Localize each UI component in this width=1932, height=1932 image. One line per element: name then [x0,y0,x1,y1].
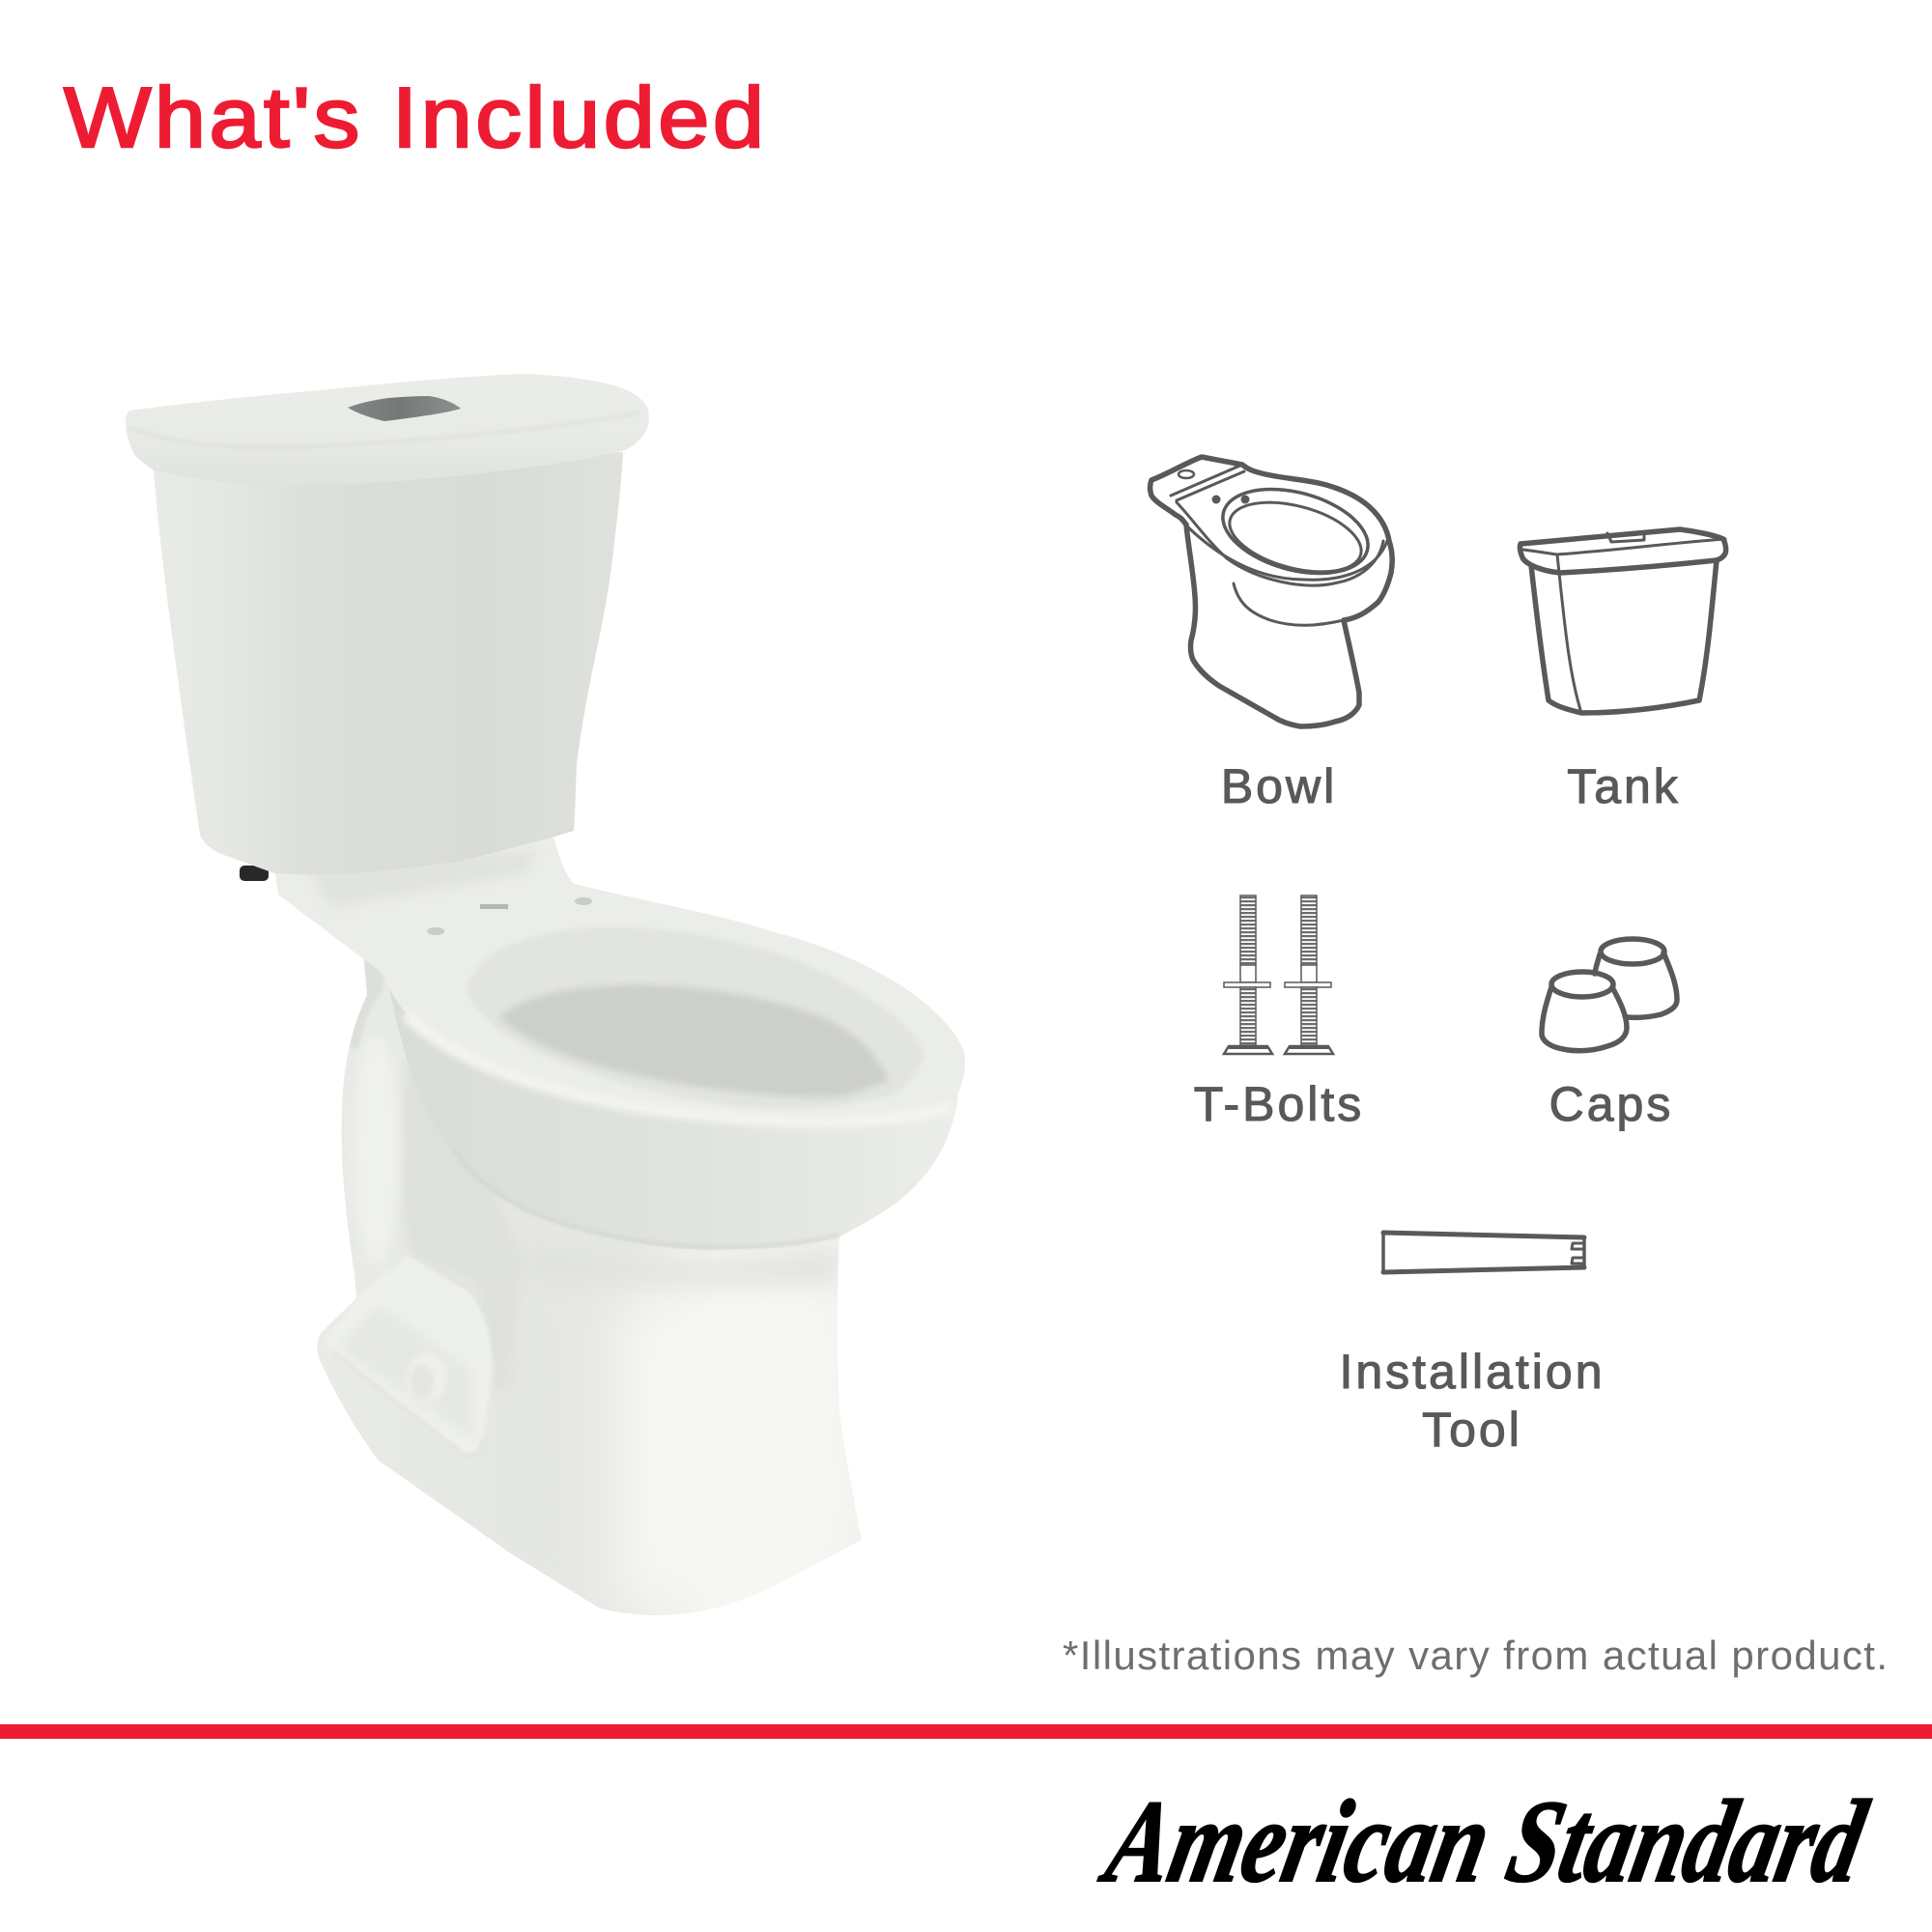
toilet bowl outer shell [389,987,958,1250]
tank lid [126,374,649,486]
bowl water area [498,984,889,1097]
toilet rim and deck [275,838,965,1119]
icon: bowl [1150,457,1392,726]
bolt two [1285,895,1333,1054]
label: Installation Tool: Tool [1422,1403,1522,1457]
icon: caps [1542,939,1677,1051]
label: Installation Tool [1339,1345,1605,1457]
bolt one [1224,895,1272,1054]
toilet pedestal and base [317,952,869,1623]
footnote: *Illustrations may vary from actual product. [1063,1633,1888,1678]
title: What's Included [64,71,767,165]
toilet bowl lower lip shadow [454,1150,839,1247]
red divider bar [0,1724,1932,1739]
tank body [154,452,623,875]
icon: tank [1520,529,1726,713]
icon: installation tool [1383,1233,1584,1272]
label: Installation Tool: Installation [1339,1345,1605,1399]
lid top edge line [128,412,640,447]
rim front highlight [406,1014,952,1122]
bowl opening [468,927,924,1109]
label: Bowl: Bowl [1221,759,1337,813]
icon: T-bolts [1224,895,1333,1054]
deck shadow [304,850,541,908]
label: Tank: Tank [1567,759,1681,813]
bolt holes and brand mark [427,897,592,935]
product photo: toilet [126,374,965,1623]
tank drain stub [240,866,269,881]
label: T-Bolts: T-Bolts [1194,1077,1364,1131]
flush button [348,396,461,421]
label: Caps: Caps [1549,1077,1673,1131]
